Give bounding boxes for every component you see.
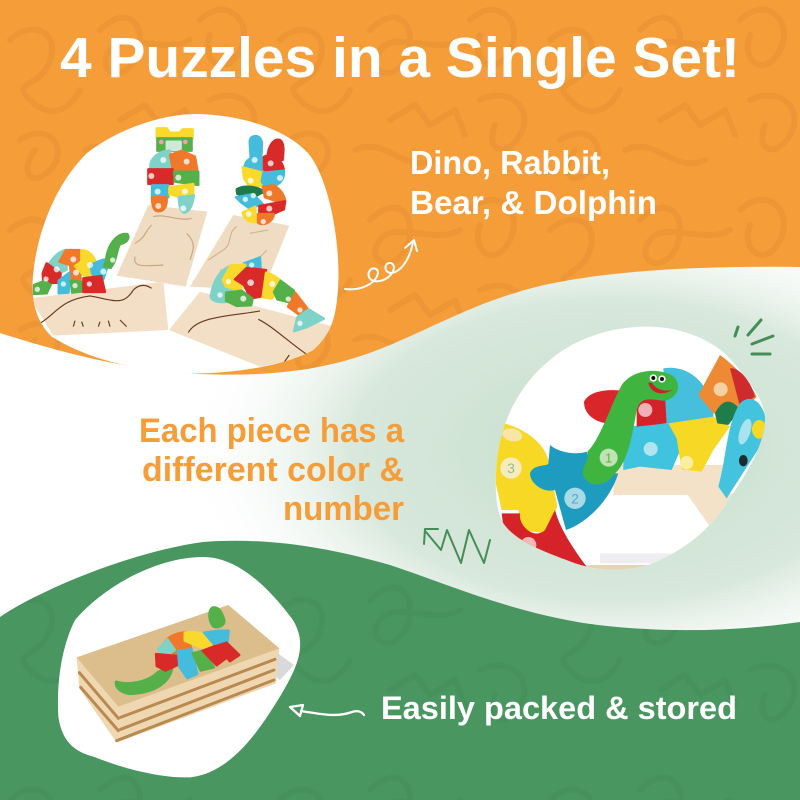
text: each piece: Each piece has a xyxy=(139,412,405,450)
dolphin puzzle xyxy=(211,257,324,331)
soft green glow behind the middle photo xyxy=(180,200,800,700)
icon: green zigzag arrow xyxy=(424,529,490,563)
text: puzzle animals: Dino, Rabbit, xyxy=(410,144,610,181)
title: 4 Puzzles in a Single Set! xyxy=(60,26,740,90)
photo: four puzzles with boards xyxy=(30,114,338,374)
photo: dinosaur close-up xyxy=(495,327,767,572)
icon: green spark lines xyxy=(735,320,773,354)
text: each piece: number xyxy=(283,490,404,528)
rabbit puzzle xyxy=(236,136,285,224)
photo: dinosaur close-up: 1 xyxy=(605,451,612,465)
text: puzzle animals: Bear, & Dolphin xyxy=(410,184,657,221)
wooden boards xyxy=(30,205,333,367)
text: each piece xyxy=(139,412,405,528)
dinosaur puzzle xyxy=(34,234,128,294)
arrow: white arrow to stack xyxy=(290,705,364,716)
text: easily packed and stored: Easily packed & stored xyxy=(381,690,737,726)
photo: dinosaur close-up: 3 xyxy=(507,460,515,476)
dinosaur on the board xyxy=(116,607,239,694)
photo: stacked puzzle boards xyxy=(58,557,300,777)
arrow: curly white arrow xyxy=(345,240,417,289)
text: each piece: different color & xyxy=(142,451,404,489)
text: puzzle animals xyxy=(410,144,657,221)
bear puzzle xyxy=(148,128,198,213)
board shadow xyxy=(276,654,294,680)
panel: orange header band xyxy=(0,0,800,375)
panel: green footer band xyxy=(0,541,800,800)
board stack xyxy=(77,605,279,743)
photo: dinosaur close-up: 2 xyxy=(571,490,579,506)
